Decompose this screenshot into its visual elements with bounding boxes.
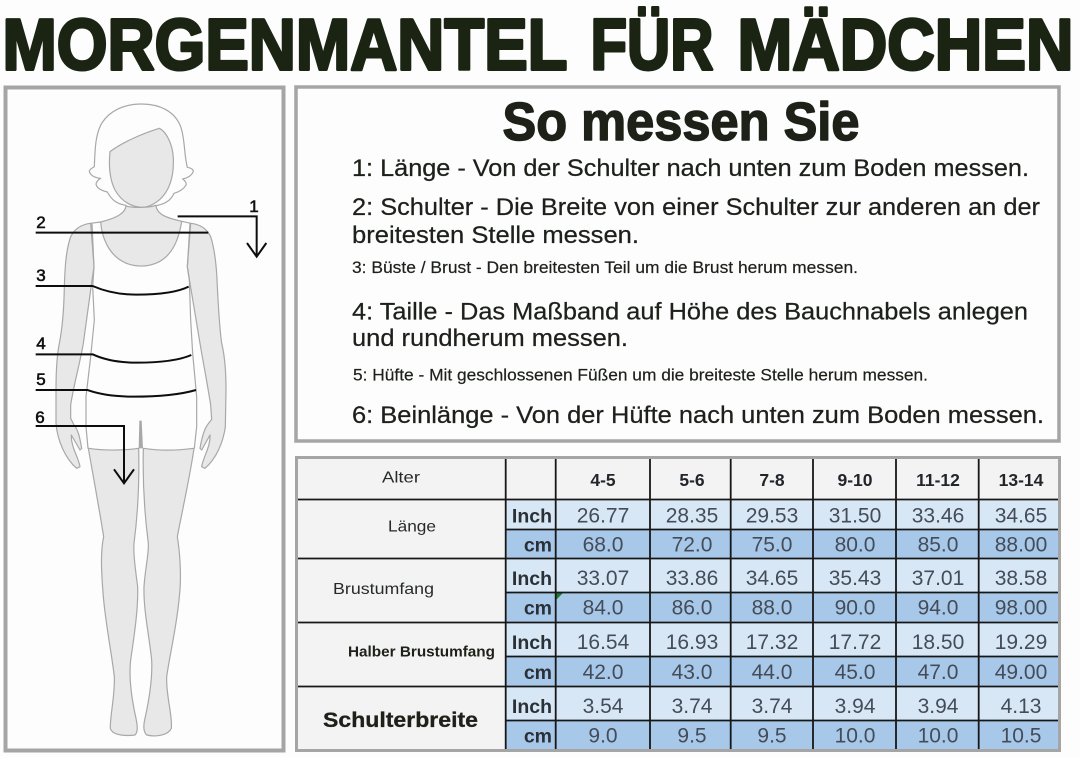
size table [296, 458, 1060, 750]
panel: how to measure [296, 87, 1059, 441]
title: FÜR [590, 6, 714, 86]
row: Länge: 31.50 [829, 504, 881, 528]
row: Brustumfang: 94.0 [918, 596, 958, 620]
row: Halber Brustumfang [348, 631, 1047, 684]
instruction 4: 4: Taille - Das Maßband auf Höhe des Bauchnabels anlegen [352, 298, 1028, 326]
left leg [88, 448, 139, 735]
header row: Alter [382, 470, 421, 486]
row: Schulterbreite: 4.13 [1001, 695, 1041, 718]
row: Brustumfang [333, 567, 1047, 620]
comment marker [556, 593, 563, 600]
row: Halber Brustumfang: 16.54 [577, 631, 630, 654]
row: Brustumfang: 88.0 [752, 596, 792, 620]
row: Halber Brustumfang: 45.0 [835, 661, 875, 684]
figure: girl silhouette [36, 104, 266, 736]
right arm [187, 223, 226, 468]
instruction 6: 6: Beinlänge - Von der Hüfte nach unten zum Boden messen. [352, 402, 1044, 429]
row: Halber Brustumfang: 42.0 [583, 661, 623, 684]
row: Schulterbreite: Schulterbreite [323, 709, 478, 732]
measure line 5 [36, 390, 196, 397]
instruction 4: und rundherum messen. [352, 325, 628, 352]
row: Halber Brustumfang: 17.32 [746, 631, 798, 654]
row: Länge: 75.0 [752, 534, 792, 556]
row: Länge: 33.46 [912, 504, 964, 528]
row: Länge: 88.00 [995, 534, 1047, 556]
measure line 6 with arrow [36, 426, 134, 483]
row: Länge: Länge [388, 518, 436, 536]
row: Schulterbreite: 3.74 [672, 695, 713, 718]
number labels: 1 [249, 197, 259, 216]
title: MORGENMANTEL [2, 6, 568, 86]
row: Brustumfang: 90.0 [835, 596, 875, 620]
title [2, 6, 1074, 86]
left arm [56, 223, 94, 468]
row: Schulterbreite: 10.0 [835, 724, 875, 748]
inseam [139, 421, 143, 448]
row: Schulterbreite: 3.94 [918, 695, 959, 718]
number labels: 6 [35, 408, 45, 427]
row: Brustumfang: 33.07 [577, 567, 629, 590]
row: Brustumfang: 34.65 [746, 567, 798, 590]
row: Brustumfang: Brustumfang [333, 581, 434, 598]
row: Halber Brustumfang: 18.50 [912, 631, 964, 654]
row: Brustumfang: 37.01 [912, 567, 964, 590]
number labels: 3 [36, 266, 46, 285]
row: Länge: 80.0 [835, 534, 875, 556]
cm row fills [506, 530, 1058, 749]
instruction 2 [352, 194, 1040, 249]
row: Schulterbreite: 10.5 [1001, 724, 1041, 748]
right leg [143, 448, 194, 736]
row: Schulterbreite: 3.74 [752, 695, 793, 718]
row: Brustumfang: 35.43 [829, 567, 881, 590]
row: Halber Brustumfang: Inch [512, 632, 552, 654]
row: Halber Brustumfang: 44.0 [752, 661, 792, 684]
row: Schulterbreite: Inch [512, 696, 552, 718]
header row: 4-5 [590, 470, 616, 490]
header row [382, 470, 1044, 490]
row: Schulterbreite: 9.5 [677, 724, 707, 748]
row: Schulterbreite [323, 695, 1041, 748]
row: Halber Brustumfang: 47.0 [918, 661, 958, 684]
hair [89, 104, 193, 206]
instruction 1: 1: Länge - Von der Schulter nach unten zum Boden messen. [352, 155, 1029, 182]
row: Länge: 29.53 [746, 504, 798, 528]
header row: 13-14 [999, 470, 1044, 490]
number labels [35, 197, 259, 427]
header row: 9-10 [837, 470, 873, 490]
row: Halber Brustumfang: 43.0 [672, 661, 712, 684]
row: Brustumfang: 33.86 [666, 567, 718, 590]
row: Brustumfang: cm [524, 598, 552, 620]
row: Brustumfang: 38.58 [995, 567, 1047, 590]
vest and shorts outline [86, 221, 197, 448]
header row: 7-8 [759, 470, 785, 490]
grid lines [298, 459, 1058, 749]
measure line 3 [36, 286, 189, 295]
inch row fills [506, 500, 1058, 720]
instruction 3: 3: Büste / Brust - Den breitesten Teil um die Brust herum messen. [352, 259, 858, 277]
row: Halber Brustumfang: Halber Brustumfang [348, 644, 495, 660]
row: Länge: 68.0 [583, 534, 623, 556]
row: Schulterbreite: 9.5 [757, 724, 787, 748]
row: Brustumfang: 86.0 [672, 596, 712, 620]
heading: So messen Sie [502, 92, 860, 152]
header row: 11-12 [916, 470, 960, 490]
instruction 2: 2: Schulter - Die Breite von einer Schulter zur anderen an der [352, 194, 1040, 221]
row: Halber Brustumfang: 19.29 [995, 631, 1047, 654]
row: Länge: cm [524, 534, 552, 556]
header row: 5-6 [679, 470, 705, 490]
row: Länge: 28.35 [666, 504, 718, 528]
instruction 5: 5: Hüfte - Mit geschlossenen Füßen um die breiteste Stelle herum messen. [353, 366, 928, 384]
measure line 4 [36, 354, 191, 363]
row: Länge: 26.77 [577, 504, 629, 528]
row: Schulterbreite: 10.0 [918, 724, 958, 748]
measure line 1 with arrow [178, 216, 266, 257]
row: Länge: 85.0 [918, 534, 958, 556]
row: Schulterbreite: 3.54 [583, 695, 624, 718]
row: Brustumfang: Inch [512, 568, 552, 590]
instruction 2: breitesten Stelle messen. [352, 222, 639, 249]
number labels: 5 [36, 370, 46, 389]
row: Schulterbreite: 3.94 [835, 695, 876, 718]
row: Brustumfang: 84.0 [583, 596, 623, 620]
row: Länge: 34.65 [995, 504, 1047, 528]
row: Halber Brustumfang: 16.93 [666, 631, 718, 654]
row: Brustumfang: 98.00 [995, 596, 1047, 620]
panel: body figure [6, 88, 284, 750]
row: Länge: Inch [512, 506, 552, 528]
measure line 2 [36, 230, 208, 236]
instruction 4 [352, 298, 1028, 352]
face [109, 128, 173, 207]
row: Halber Brustumfang: 17.72 [829, 631, 881, 654]
row: Halber Brustumfang: 49.00 [995, 661, 1047, 684]
row: Schulterbreite: cm [524, 726, 552, 748]
row: Halber Brustumfang: cm [524, 662, 552, 684]
neck and chest [101, 205, 182, 266]
row: Schulterbreite: 9.0 [588, 724, 618, 748]
row: Länge: 72.0 [672, 534, 712, 556]
number labels: 4 [36, 334, 46, 353]
row: Länge [388, 504, 1047, 556]
number labels: 2 [36, 213, 46, 232]
